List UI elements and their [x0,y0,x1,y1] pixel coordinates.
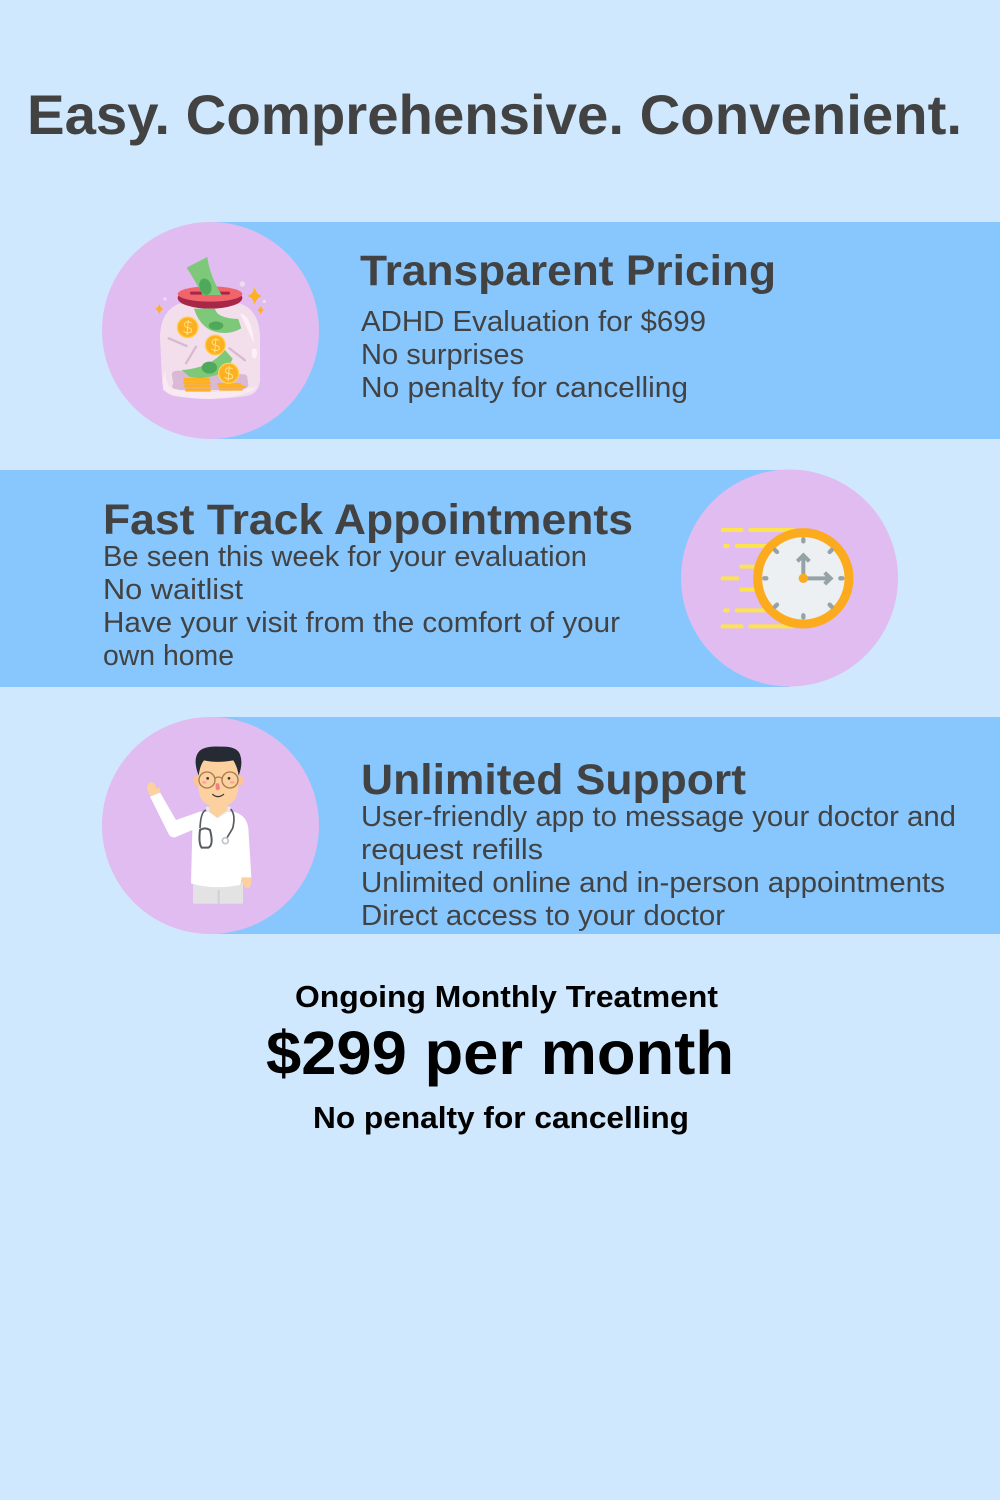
text block: support details: request refills [361,834,543,866]
text block: pricing details [361,306,706,404]
panel: unlimited support [102,717,1000,934]
text block: appointment details: No waitlist [103,574,243,606]
panel: transparent pricing [102,222,1000,439]
monthly price: $299 per month [266,1019,734,1087]
heading: unlimited support: Unlimited Support [361,756,746,804]
cancellation note: No penalty for cancelling [313,1100,689,1135]
band: appointments [0,470,790,687]
text block: support details: Unlimited online and in-person appointments [361,867,945,899]
pricing summary [266,979,734,1135]
text block: support details [361,801,956,932]
text block: pricing details: No surprises [361,339,524,371]
icon: money jar [155,257,266,399]
text block: support details: Direct access to your doctor [361,900,726,932]
text block: support details: User-friendly app to message your doctor and [361,801,956,833]
text block: appointment details: Have your visit from the comfort of your [103,607,621,639]
icon circle: pricing [102,222,319,439]
text block: appointment details: Be seen this week for your evaluation [103,541,587,573]
icon: doctor [147,747,251,904]
icon: fast clock [723,530,849,626]
text block: pricing details: ADHD Evaluation for $699 [361,306,706,338]
panel: fast track appointments [0,470,898,687]
band: support [211,717,1000,934]
title: Easy. Comprehensive. Convenient. [27,83,962,146]
heading: transparent pricing: Transparent Pricing [360,247,776,295]
band: pricing [211,222,1000,439]
heading: fast track appointments: Fast Track Appointments [103,496,633,544]
icon circle: appointments [681,470,898,686]
text block: appointment details [103,541,621,672]
text block: appointment details: own home [103,640,234,672]
icon circle: support [102,717,319,934]
text block: pricing details: No penalty for cancelling [361,372,688,404]
label: ongoing monthly treatment: Ongoing Monthly Treatment [295,979,718,1014]
